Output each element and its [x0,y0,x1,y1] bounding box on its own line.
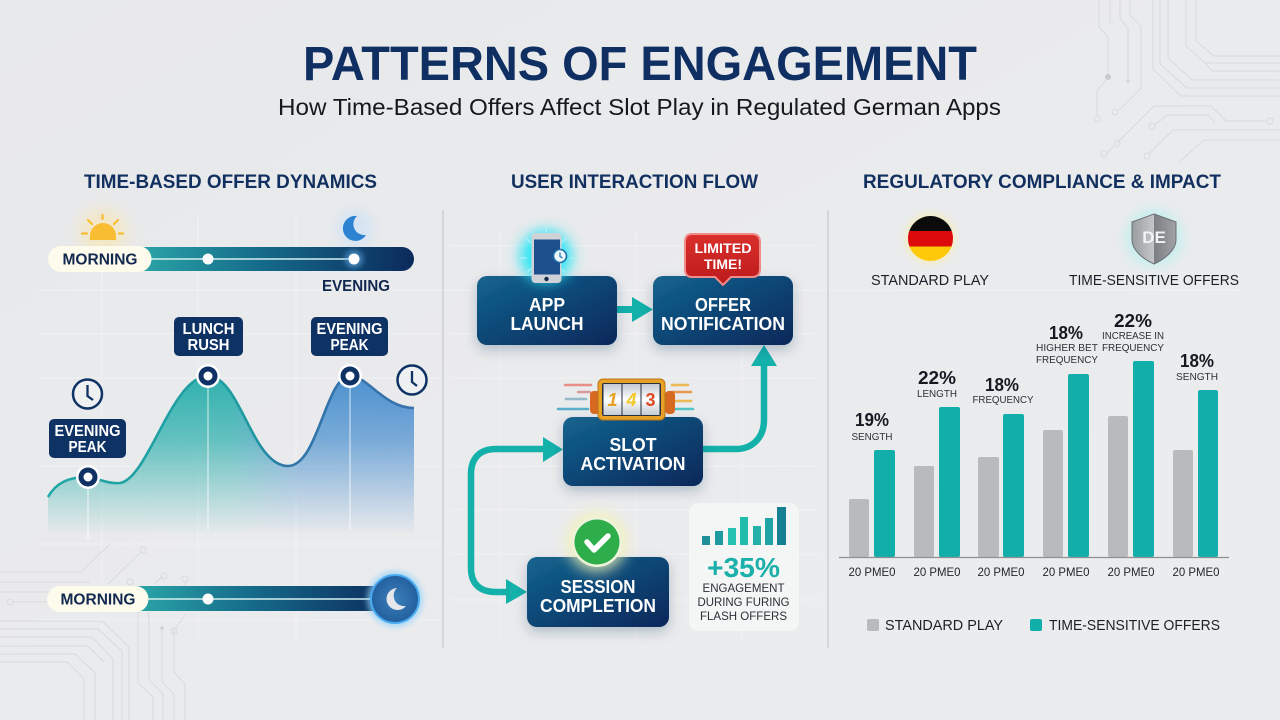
box: app launch [477,276,617,345]
tag: evening peak (right): PEAK [330,337,369,354]
tag: evening peak (left) [49,419,126,458]
label: standard play: STANDARD PLAY [871,272,989,289]
panel: time-based offer dynamics [47,172,426,627]
legend: STANDARD PLAY [885,617,1003,634]
icon: moon badge [367,571,423,627]
callout: limited time: LIMITED [694,240,752,256]
tag: evening peak (left): EVENING [54,423,120,440]
value labels: HIGHER BET [1036,342,1099,354]
value labels: FREQUENCY [1036,354,1098,366]
stat card: DURING FURING [698,595,790,609]
icon: slot machine: 3 [645,390,656,410]
callout: limited time: TIME! [704,256,742,272]
value labels: FREQUENCY [1102,342,1164,354]
axis labels: 20 PME0 [1042,565,1090,579]
axis labels: 20 PME0 [978,565,1025,579]
icon: clock left [73,380,102,408]
value labels [852,311,1218,443]
tag: evening peak (left): PEAK [68,439,107,456]
box: session completion: SESSION [560,577,636,597]
value labels: SENGTH [1176,371,1218,383]
heading: user interaction flow: USER INTERACTION FLOW [511,172,758,193]
box: slot activation: SLOT [610,435,657,455]
icon: german flag [904,212,956,264]
value labels: 19% [855,410,889,430]
value labels: 18% [1049,323,1083,343]
axis labels: 20 PME0 [1108,565,1155,579]
box: offer notification [653,276,793,345]
value labels: FREQUENCY [972,394,1034,406]
tag: evening peak (right) [311,317,388,356]
value labels: INCREASE IN [1102,330,1164,342]
box: offer notification: NOTIFICATION [661,314,785,334]
heading: time-based offer dynamics: TIME-BASED OFFER DYNAMICS [84,172,377,193]
icon: clock right [398,366,426,394]
value labels: 22% [918,368,956,388]
arrow: loop to slot and session [471,437,563,604]
box: offer notification: OFFER [695,295,751,315]
mini bar chart [702,507,786,545]
value labels: SENGTH [852,431,892,443]
icon: slot machine [558,379,693,420]
marker: evening [338,364,362,388]
area chart [48,364,414,540]
axis labels [848,565,1220,579]
arrow: app launch to offer [617,297,653,322]
icon: sun [79,208,127,256]
value labels: 18% [985,375,1019,395]
value labels: 18% [1180,351,1214,371]
box: app launch: APP [529,295,565,315]
circuit decoration: top right [1094,0,1280,163]
box: session completion: COMPLETION [540,596,656,616]
bottom timeline: MORNING [60,592,136,608]
icon: DE shield: DE [1142,228,1166,247]
top timeline: MORNING [62,252,138,268]
box: app launch: LAUNCH [510,314,584,334]
axis labels: 20 PME0 [848,565,896,579]
marker: early [76,465,100,489]
icon: slot machine: 1 [607,390,618,410]
panel: user interaction flow [471,172,799,631]
legend [867,617,1220,634]
panel: regulatory compliance and impact [839,172,1239,634]
subtitle: How Time-Based Offers Affect Slot Play in Regulated German Apps [278,94,1001,120]
tag: lunch rush: RUSH [188,337,230,354]
axis labels: 20 PME0 [1172,565,1220,579]
box: slot activation: ACTIVATION [580,454,686,474]
top timeline [48,246,414,272]
label: time-sensitive offers: TIME-SENSITIVE OFFERS [1069,272,1239,289]
bottom timeline [47,571,423,627]
axis labels: 20 PME0 [914,565,961,579]
stat card: FLASH OFFERS [700,609,787,623]
heading: regulatory compliance: REGULATORY COMPLIANCE & IMPACT [863,172,1221,193]
legend: TIME-SENSITIVE OFFERS [1049,617,1220,634]
icon: DE shield [1126,210,1182,266]
box: session completion [527,557,669,627]
value labels: LENGTH [917,388,957,400]
marker: lunch [196,364,220,388]
value labels: 22% [1114,311,1152,331]
label: evening: EVENING [322,278,390,295]
icon: slot machine: 4 [625,390,637,410]
stat card [689,503,799,631]
title: PATTERNS OF ENGAGEMENT [303,38,977,91]
icon: check badge [567,512,627,572]
bar chart [839,311,1229,579]
icon: phone with clock [520,227,577,283]
box: slot activation [563,417,703,486]
circuit decoration: bottom left [0,544,188,720]
stat card: ENGAGEMENT [702,581,785,595]
arrow: slot to offer [703,345,777,449]
tag: lunch rush [174,317,243,356]
tag: lunch rush: LUNCH [182,321,234,338]
tag: evening peak (right): EVENING [316,321,382,338]
icon: moon [337,210,373,246]
stat card: +35% [707,552,780,583]
callout: limited time [685,234,760,285]
